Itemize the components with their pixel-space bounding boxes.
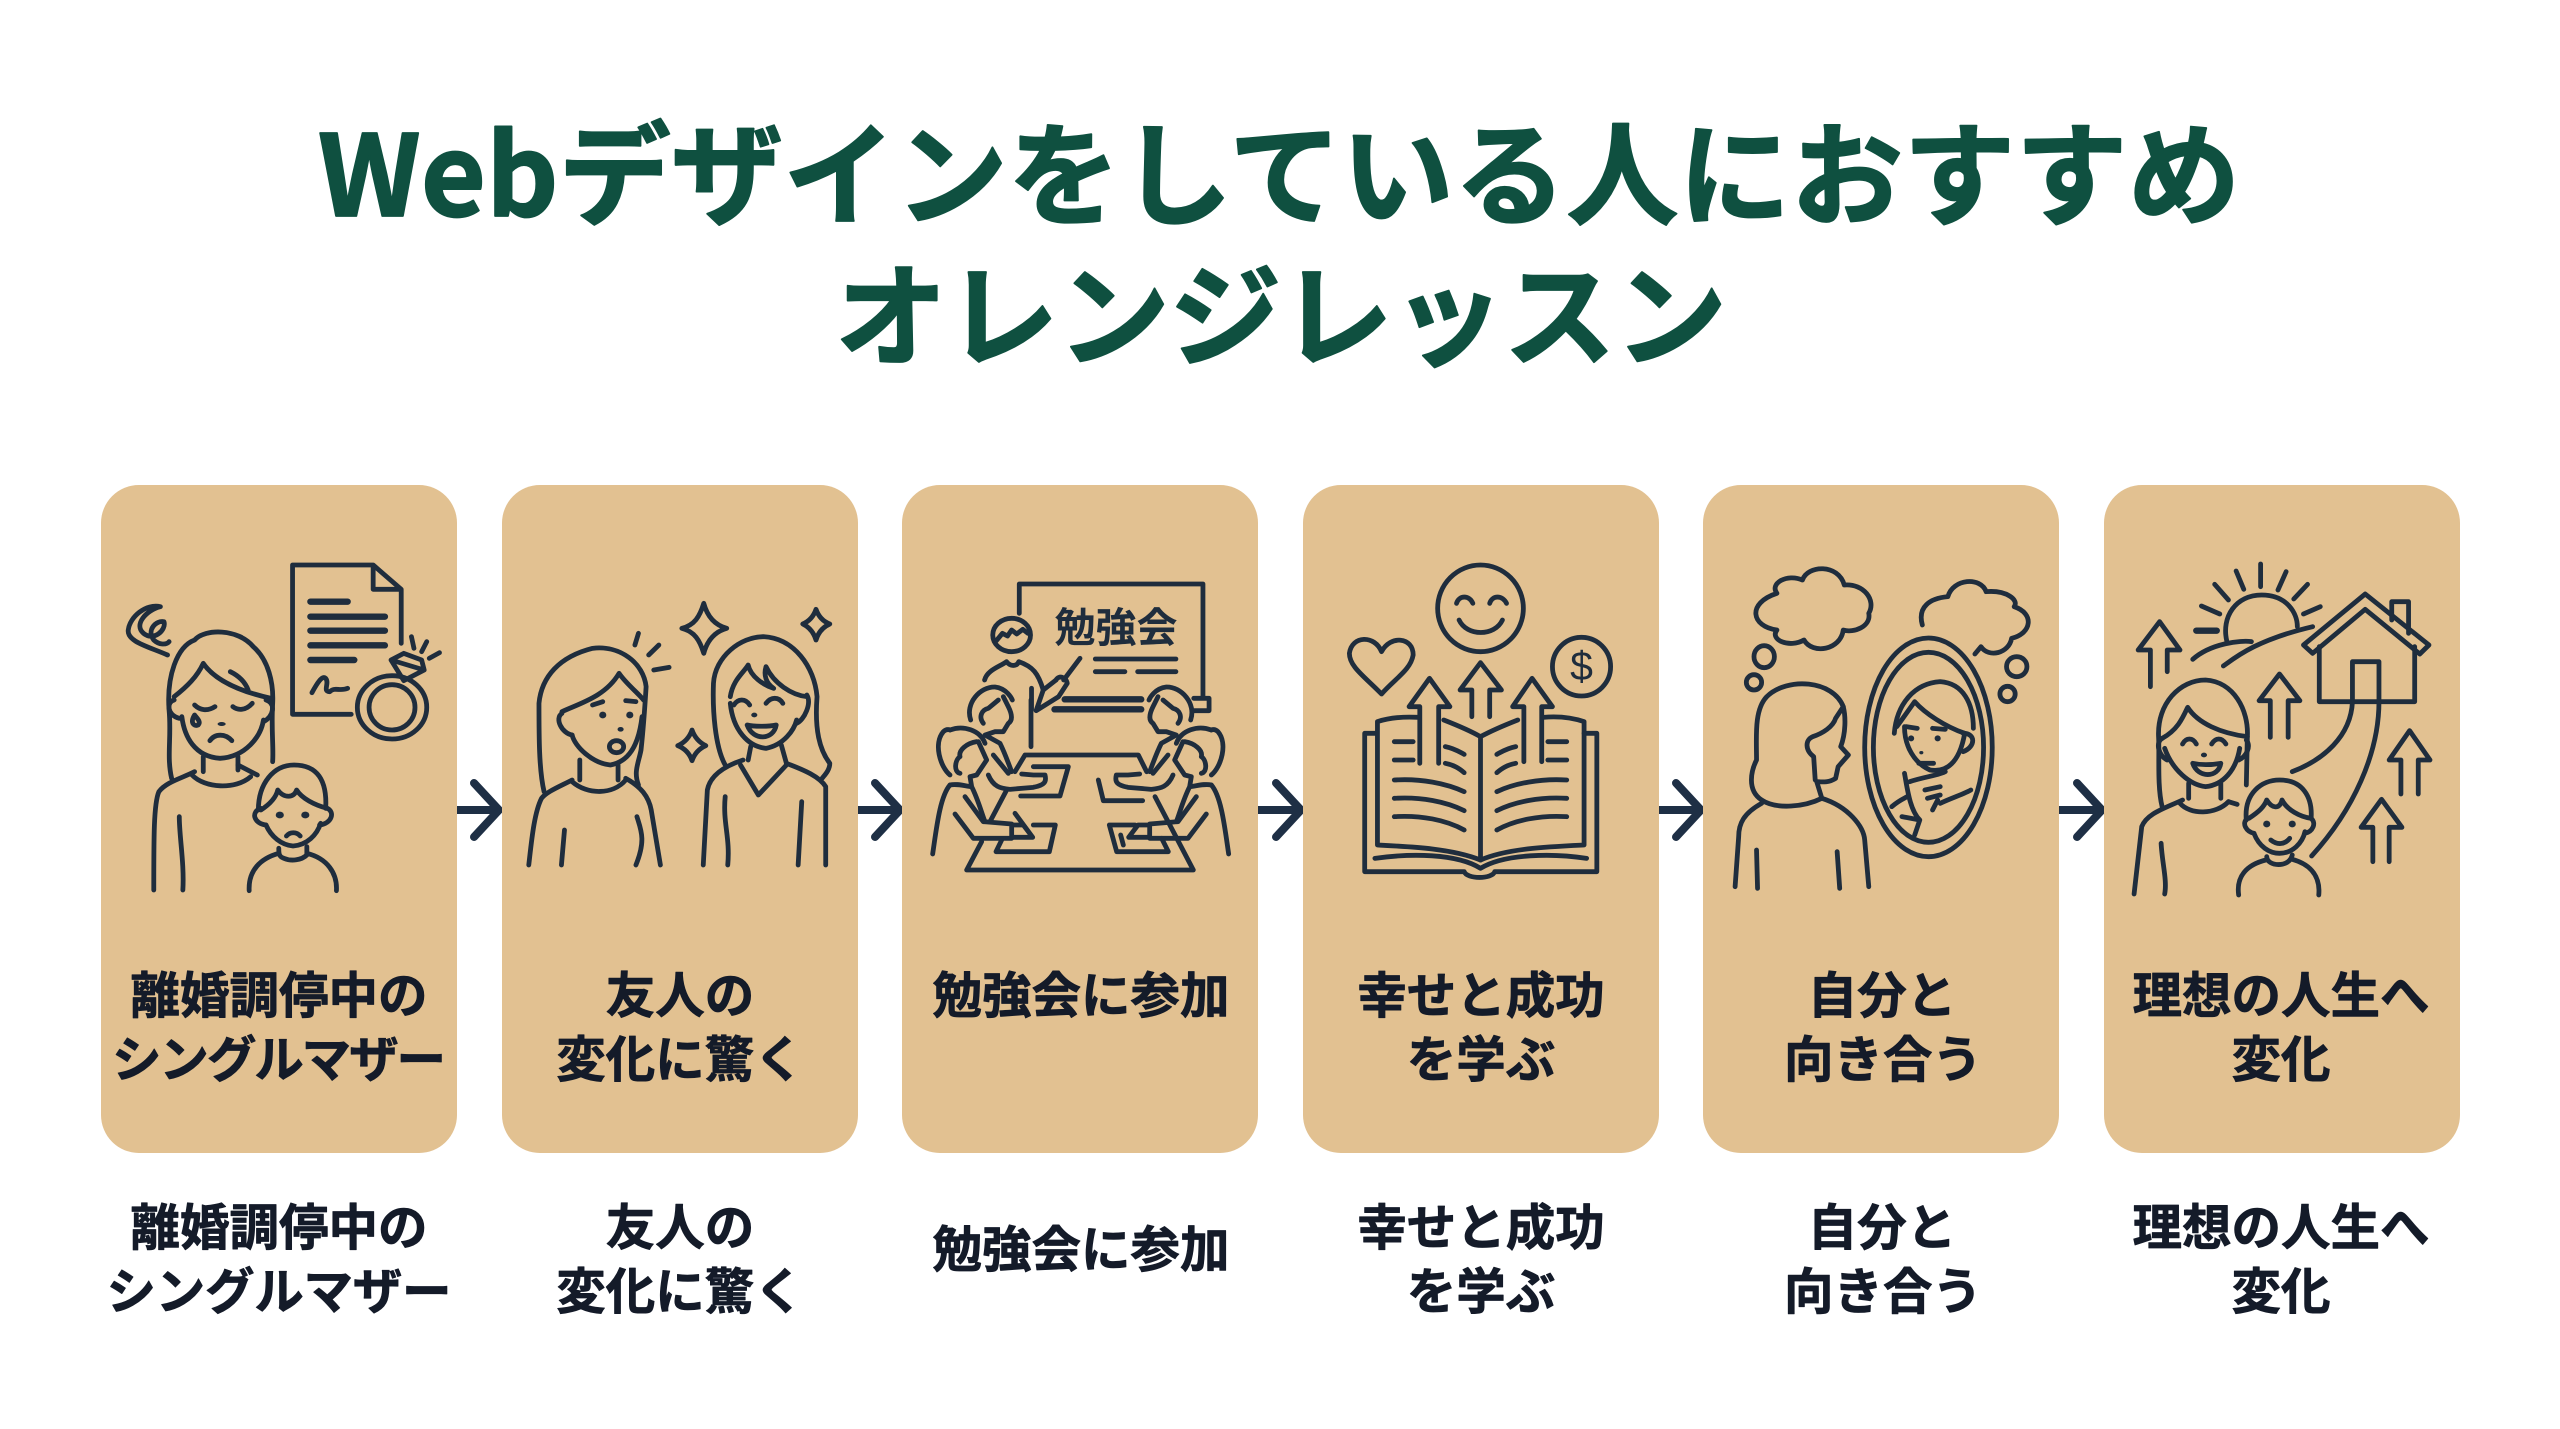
board and teacher <box>985 584 1209 711</box>
caption 1: 離婚調停中の <box>130 1189 428 1260</box>
caption 4 <box>1357 1189 1605 1324</box>
panel: step 5 face yourself <box>1703 485 2059 1153</box>
caption 2: 変化に驚く <box>556 1253 804 1324</box>
card label: 勉強会に参加 <box>932 957 1230 1028</box>
panel: step 4 learn happiness and success <box>1303 485 1659 1153</box>
caption 5: 向き合う <box>1784 1253 1982 1324</box>
panel: step 2 friend's change <box>502 485 858 1153</box>
caption 4: を学ぶ <box>1407 1253 1555 1324</box>
caption 2 <box>556 1189 804 1324</box>
caption 1: シングルマザー <box>106 1253 452 1324</box>
caption 1 <box>106 1189 452 1324</box>
arrow 5 <box>2059 783 2102 837</box>
caption 6 <box>2132 1189 2430 1324</box>
caption 3: 勉強会に参加 <box>932 1211 1230 1282</box>
card label <box>1784 957 1982 1092</box>
icon: study group meeting with teacher and board <box>933 584 1229 870</box>
panel: step 6 ideal life <box>2104 485 2460 1153</box>
icon: surprised woman and sparkling friend <box>529 603 830 865</box>
card label: 変化 <box>2232 1021 2330 1092</box>
caption 6: 理想の人生へ <box>2132 1189 2430 1260</box>
card label <box>1357 957 1605 1092</box>
card label: 自分と <box>1808 957 1956 1028</box>
card label <box>2132 957 2430 1092</box>
title: オレンジレッスン <box>835 228 1727 390</box>
arrow 1 <box>457 783 499 837</box>
card label: 幸せと成功 <box>1357 957 1605 1028</box>
caption 2: 友人の <box>606 1189 754 1260</box>
title: Webデザインをしている人におすすめ <box>318 87 2240 249</box>
caption 5 <box>1784 1189 1982 1324</box>
icon: sad mother and child with divorce paper and ring <box>128 565 439 891</box>
card label: 友人の <box>606 957 754 1028</box>
caption 4: 幸せと成功 <box>1357 1189 1605 1260</box>
dollar sign: $ <box>1570 643 1593 689</box>
icon: happy family, house, sun and upward arrows <box>2134 564 2430 895</box>
panel: step 3 study group <box>902 485 1258 1153</box>
icon: open book with arrows, smile, heart, dollar <box>1349 565 1611 877</box>
board text: 勉強会 <box>1054 594 1178 654</box>
card label: を学ぶ <box>1407 1021 1555 1092</box>
arrow 3 <box>1258 783 1301 837</box>
caption 5: 自分と <box>1808 1189 1956 1260</box>
card label: 変化に驚く <box>556 1021 804 1092</box>
card label: 向き合う <box>1784 1021 1982 1092</box>
arrow 2 <box>858 783 900 837</box>
icon: woman looking in mirror with thought clouds <box>1735 569 2028 888</box>
arrow 4 <box>1659 783 1701 837</box>
caption 6: 変化 <box>2232 1253 2330 1324</box>
card label <box>556 957 804 1092</box>
card label: シングルマザー <box>112 1021 446 1092</box>
card label <box>112 957 446 1092</box>
card label: 離婚調停中の <box>130 957 428 1028</box>
card label: 理想の人生へ <box>2132 957 2430 1028</box>
panel: step 1 single mother <box>101 485 457 1153</box>
table, papers and students <box>933 687 1229 870</box>
title <box>318 87 2240 390</box>
